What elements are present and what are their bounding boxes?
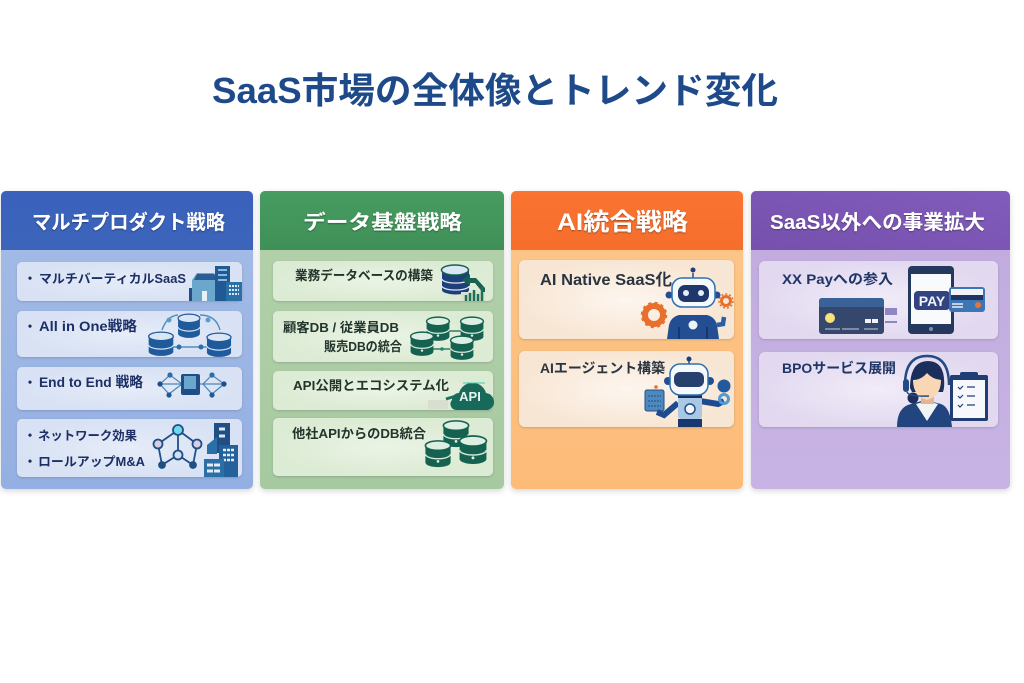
card: 業務データベースの構築: 業務データベースの構築 <box>295 268 433 283</box>
card: 顧客DB / 従業員DB / 販売DBの統合 <box>273 311 493 362</box>
card: マルチバーティカルSaaS: マルチバーティカルSaaS <box>39 272 186 286</box>
panel header: SaaS以外への事業拡大: SaaS以外への事業拡大 <box>770 211 985 234</box>
panel header: データ基盤戦略 <box>260 191 504 250</box>
icon: robot with gears <box>642 268 733 339</box>
title: SaaS市場の全体像とトレンド変化 <box>212 70 778 111</box>
card: BPOサービス展開 <box>759 352 998 427</box>
card: マルチバーティカルSaaS: ・ <box>24 271 37 286</box>
icon: connected databases <box>149 314 231 357</box>
card: AI Native SaaS化 <box>519 260 734 339</box>
card: AIエージェント構築 <box>519 351 734 427</box>
card: 業務データベースの構築 <box>273 261 493 301</box>
icon: database with chart <box>442 265 485 301</box>
icon: end to end network <box>157 372 227 398</box>
card: XX Payへの参入 <box>759 261 998 339</box>
card: 顧客DB / 従業員DB / 販売DBの統合: 販売DBの統合 <box>324 339 402 354</box>
icon: network nodes <box>154 425 202 468</box>
icon: buildings <box>189 266 242 301</box>
card: ネットワーク効果 / ロールアップM&A <box>17 419 242 477</box>
icon: city buildings <box>204 423 238 477</box>
card: 顧客DB / 従業員DB / 販売DBの統合: 顧客DB / 従業員DB <box>283 320 399 335</box>
card: ネットワーク効果 / ロールアップM&A: ・ <box>24 428 37 443</box>
icon: support operator <box>897 356 952 427</box>
panel: マルチプロダクト戦略 <box>1 191 253 489</box>
card: ネットワーク効果 / ロールアップM&A: ネットワーク効果 <box>38 429 137 443</box>
panel header: SaaS以外への事業拡大 <box>751 191 1010 250</box>
panel header: マルチプロダクト戦略: マルチプロダクト戦略 <box>32 210 225 234</box>
panel: データ基盤戦略 <box>260 191 504 489</box>
icon: API cloud: API <box>459 389 481 404</box>
card: End to End 戦略: ・ <box>24 375 37 390</box>
panel header: AI統合戦略 <box>511 191 743 250</box>
panel: SaaS以外への事業拡大 <box>751 191 1010 489</box>
icon: robot with tools <box>645 356 730 427</box>
card: All in One戦略 <box>17 311 242 357</box>
card: ネットワーク効果 / ロールアップM&A: ・ <box>24 454 37 469</box>
panel header: マルチプロダクト戦略 <box>1 191 253 250</box>
icon: phone with PAY <box>908 266 985 334</box>
card: API公開とエコシステム化 <box>273 371 494 410</box>
card: 他社APIからのDB統合 <box>273 418 493 476</box>
card: 他社APIからのDB統合: 他社APIからのDB統合 <box>292 426 426 441</box>
card: AI Native SaaS化: AI Native SaaS化 <box>540 271 672 289</box>
icon: API cloud <box>428 383 494 410</box>
icon: payment card <box>819 298 897 334</box>
icon: database cluster <box>411 317 483 360</box>
card: API公開とエコシステム化: API公開とエコシステム化 <box>293 378 449 393</box>
card: BPOサービス展開: BPOサービス展開 <box>782 360 896 376</box>
card: All in One戦略: ・ <box>24 319 37 334</box>
card: マルチバーティカルSaaS <box>17 262 242 301</box>
panel: AI統合戦略 <box>511 191 743 489</box>
icon: phone with PAY: PAY <box>919 293 946 309</box>
panel header: AI統合戦略: AI統合戦略 <box>557 209 688 236</box>
card: All in One戦略: All in One戦略 <box>39 318 137 334</box>
card: End to End 戦略 <box>17 367 242 410</box>
icon: clipboard <box>950 372 988 421</box>
card: ネットワーク効果 / ロールアップM&A: ロールアップM&A <box>38 455 145 469</box>
card: End to End 戦略: End to End 戦略 <box>39 374 143 390</box>
panel header: データ基盤戦略: データ基盤戦略 <box>303 210 462 234</box>
card: XX Payへの参入: XX Payへの参入 <box>782 271 893 287</box>
icon: databases <box>425 421 486 467</box>
card: AIエージェント構築: AIエージェント構築 <box>540 360 665 376</box>
